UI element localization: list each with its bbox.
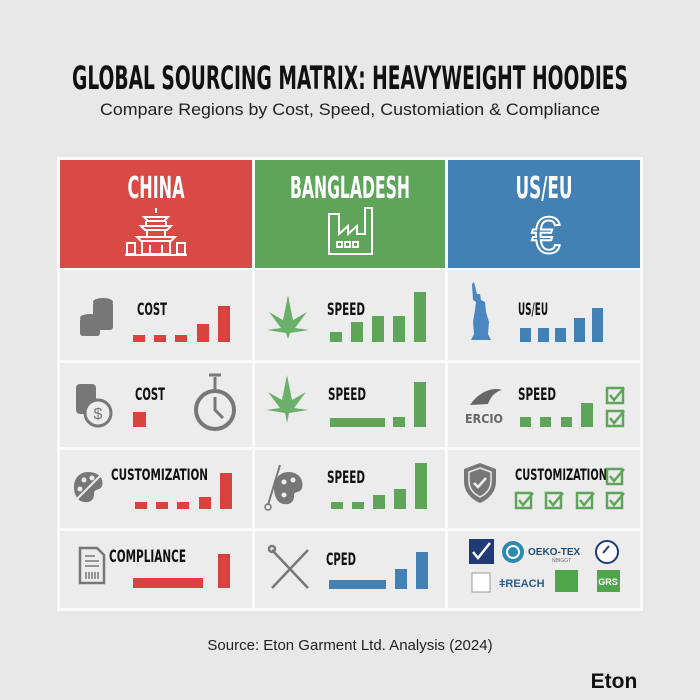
icon: document [80,548,104,583]
logo: small emblem [472,573,490,592]
icon: ercio logo: ERCIO [465,412,503,426]
icon: leaf [266,375,308,423]
icon: checkboxes [516,469,624,508]
icon: coins [80,298,113,336]
cell: China cost [80,298,230,342]
icon: factory [329,208,372,254]
bar [133,412,146,427]
bar chart [133,554,230,588]
bar chart [329,552,428,589]
cell: China cost 2: COST [135,385,165,405]
cell: China cost: COST [137,300,167,320]
logo: Eton: Eton [591,670,637,693]
cell: Bangladesh speed 2: SPEED [328,385,366,405]
cell: US/EU customization: CUSTOMIZATION [515,465,607,484]
icon: pagoda [125,208,187,255]
cell: US/EU speed: SPEED [518,385,556,405]
bar chart [330,382,426,427]
bar chart [520,308,603,342]
cell: Bangladesh speed 3 [265,463,427,510]
icon: leaf [267,295,309,339]
logo: green square [555,570,578,592]
cell: Bangladesh speed 3: SPEED [327,468,365,488]
header: Bangladesh [255,160,445,268]
bar chart [331,463,427,509]
icon: coins dollar [76,384,111,426]
cell: China cost 2 [76,375,234,429]
cell: Bangladesh CPED [269,546,428,589]
cell: China customization [74,465,232,509]
icon: shield [464,463,496,503]
cell: Bangladesh speed 2 [266,375,426,427]
icon: stopwatch [196,375,234,429]
logo: OEKO-TEX: NBIGGT [552,558,571,564]
logo: GRS [597,570,620,592]
icon: checkboxes [607,388,624,426]
icon: palette brush [265,465,302,510]
bar chart [520,403,593,427]
icon: ercio logo [465,389,503,426]
cell: certification logos [469,539,620,592]
logo: GRS: GRS [598,577,618,587]
cell: US/EU: US/EU [518,300,548,320]
cell: Bangladesh CPED: CPED [326,550,356,570]
cell: China customization: CUSTOMIZATION [111,465,208,484]
cell: US/EU [471,282,603,342]
header: China: CHINA [128,171,185,206]
header: US/EU [448,160,640,268]
bar chart [135,473,232,509]
icon: coins dollar: $ [94,406,103,423]
bar chart [330,292,426,342]
cell: Bangladesh speed [267,292,426,342]
cell: US/EU speed [465,385,624,427]
subtitle: Compare Regions by Cost, Speed, Customiation & Compliance [100,100,600,119]
icon: euro: € [532,207,561,265]
cell: China compliance [80,547,230,588]
cell: China compliance: COMPLIANCE [109,547,186,567]
bar chart [133,306,230,342]
logo: check square [469,539,494,564]
header: Bangladesh: BANGLADESH [290,171,410,206]
icon: palette [74,472,102,502]
icon: statue of liberty [471,282,491,340]
icon: needles [269,546,308,588]
source: Source: Eton Garment Ltd. Analysis (2024) [207,637,493,654]
logo: OEKO-TEX [502,541,581,564]
cell: Bangladesh speed: SPEED [327,300,365,320]
matrix grid [57,157,643,611]
header: China [60,160,252,268]
logo: OEKO-TEX: OEKO-TEX [528,547,581,558]
header: US/EU: US/EU [516,171,572,206]
logo: round badge [596,541,618,563]
cell: US/EU customization [464,463,624,508]
logo: REACH: ǂREACH [499,578,545,590]
